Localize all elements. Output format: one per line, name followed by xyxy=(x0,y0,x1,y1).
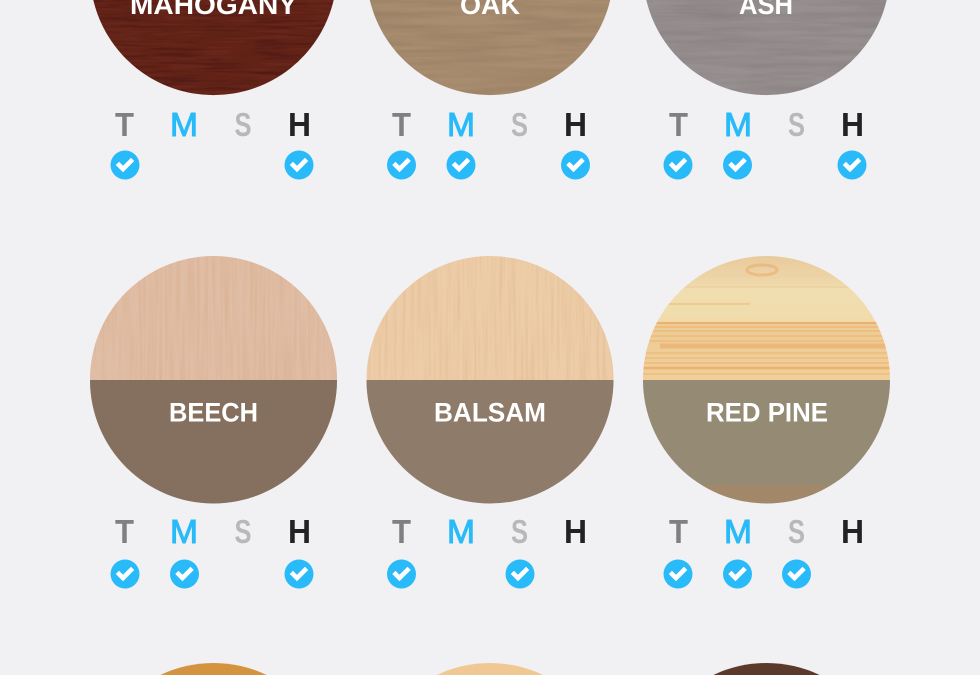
use letters: S xyxy=(788,106,805,143)
use letters: M xyxy=(447,106,475,143)
use letters: S xyxy=(511,106,528,143)
card: ash xyxy=(646,0,887,180)
use letters: T xyxy=(669,513,688,550)
use letters: M xyxy=(170,513,198,550)
check marks xyxy=(664,560,811,588)
label: red pine: RED PINE xyxy=(706,398,828,428)
use letters: H xyxy=(841,106,864,143)
swatch: ash wood xyxy=(646,0,887,95)
use letters: S xyxy=(234,513,252,550)
use letters xyxy=(669,513,864,550)
use letters: T xyxy=(392,513,411,550)
card: oak xyxy=(370,0,610,180)
swatch: red pine wood xyxy=(640,256,892,504)
use letters: H xyxy=(564,106,587,143)
swatch: partial dark wood xyxy=(713,663,820,675)
use letters xyxy=(115,106,311,143)
use letters xyxy=(669,106,864,143)
swatch: partial pale wood xyxy=(437,663,543,675)
check marks xyxy=(110,560,314,588)
check marks xyxy=(387,560,534,588)
use letters: T xyxy=(392,106,411,143)
swatch: partial amber wood xyxy=(160,663,267,675)
use letters: H xyxy=(288,513,311,550)
use letters xyxy=(115,513,311,550)
check marks xyxy=(110,150,314,180)
check marks xyxy=(387,150,590,180)
swatch: oak wood xyxy=(370,0,610,95)
use letters: T xyxy=(669,106,688,143)
card: mahogany xyxy=(93,0,334,180)
swatch: beech wood xyxy=(90,256,337,504)
use letters: M xyxy=(447,513,475,550)
use letters: S xyxy=(511,513,528,550)
swatch: balsam wood xyxy=(366,256,614,504)
use letters xyxy=(392,106,587,143)
use letters: H xyxy=(564,513,587,550)
use letters: H xyxy=(288,106,311,143)
check marks xyxy=(664,150,866,180)
label: beech: BEECH xyxy=(169,398,258,428)
label: balsam: BALSAM xyxy=(434,398,546,428)
use letters xyxy=(392,513,587,550)
use letters: T xyxy=(115,106,134,143)
use letters: M xyxy=(724,106,752,143)
swatch: mahogany wood xyxy=(93,0,334,95)
use letters: H xyxy=(841,513,864,550)
use letters: M xyxy=(724,513,752,550)
use letters: S xyxy=(788,513,805,550)
card: balsam xyxy=(366,256,614,588)
card: beech xyxy=(90,256,337,588)
card: red pine xyxy=(640,256,892,588)
use letters: T xyxy=(115,513,134,550)
use letters: M xyxy=(170,106,198,143)
use letters: S xyxy=(234,106,252,143)
